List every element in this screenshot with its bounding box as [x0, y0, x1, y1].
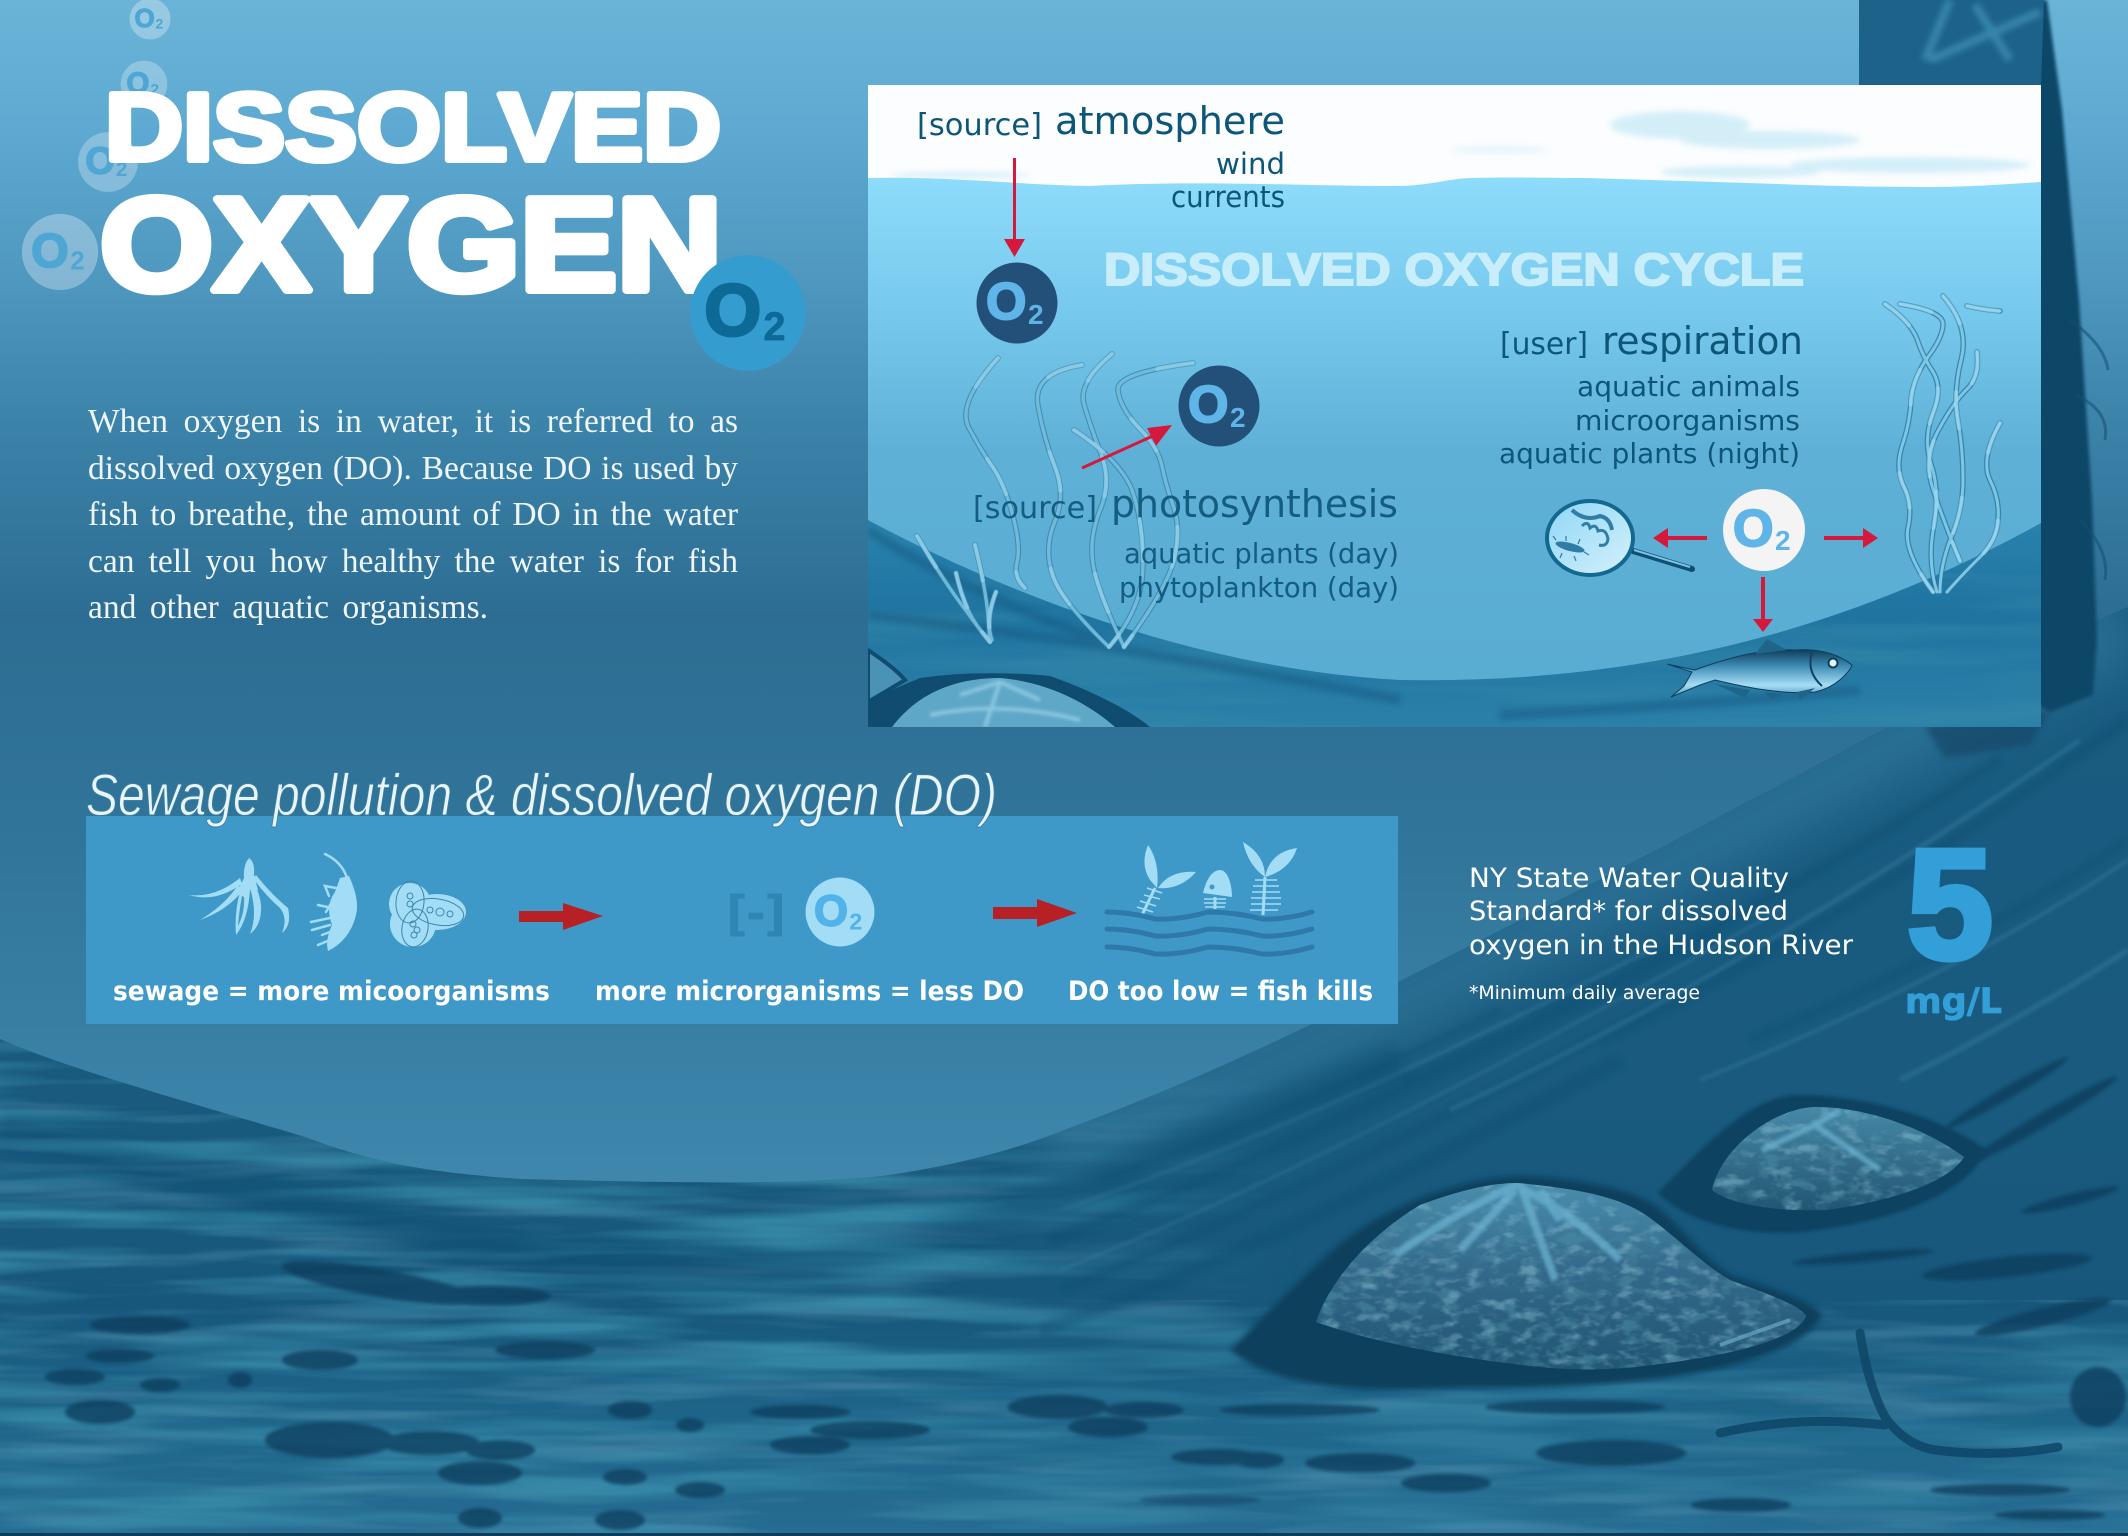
callout: 5 mg/L: mg/L — [1905, 982, 2002, 1022]
icon: large O2 bubble: 2 — [764, 305, 785, 349]
bubble 2: 2 — [150, 82, 159, 99]
bubble 1: 2 — [156, 16, 164, 32]
icon: cell cluster — [389, 880, 466, 949]
text block: intro paragraph — [88, 403, 738, 626]
text block: intro paragraph: can tell you how healthy the water is for fish — [88, 543, 738, 580]
arrow: less oxygen to fish kills — [993, 899, 1077, 927]
clam shell: rear — [1658, 1095, 1986, 1233]
bubble 1: O — [134, 3, 155, 33]
water — [868, 178, 2041, 727]
text block: photosynthesis: aquatic plants (day) — [1124, 537, 1399, 570]
heading: sewage pollution: Sewage pollution & dissolved oxygen (DO) — [86, 763, 997, 828]
bubble 4: 2 — [70, 246, 85, 276]
bubble 3: O — [85, 141, 115, 183]
arrow: plants to O2 — [1082, 425, 1172, 468]
title line: dissolved: DISSOLVED — [105, 74, 721, 181]
icon: minus O2: [-] — [726, 886, 786, 942]
icon: large O2 bubble: O — [704, 270, 761, 352]
icon: O2 dark, photosynthesis: 2 — [1230, 402, 1246, 433]
labels — [113, 976, 1373, 1007]
text block: respiration: aquatic plants (night) — [1499, 437, 1800, 470]
text block: NY standard — [1469, 863, 1854, 1004]
background O2 bubbles — [22, 0, 171, 290]
text block: atmosphere: wind — [1216, 147, 1285, 181]
icon: minus O2: 2 — [849, 909, 862, 935]
arrow: atmosphere to O2 — [1004, 158, 1025, 257]
icon: large O2 bubble — [690, 255, 806, 371]
icon: O2 dark, photosynthesis: O — [1188, 376, 1228, 434]
panel: sewage pollution — [86, 816, 1398, 1024]
text block: NY standard: NY State Water Quality — [1469, 863, 1789, 894]
seaweed: right — [1885, 296, 2000, 592]
sky — [868, 85, 2041, 195]
text block: NY standard: oxygen in the Hudson River — [1469, 930, 1854, 961]
icon: magnifying glass with microorganisms — [1547, 501, 1692, 575]
text block: respiration: respiration — [1602, 319, 1803, 363]
icon: O2 white: 2 — [1775, 525, 1791, 556]
callout: 5 mg/L: 5 — [1907, 818, 1993, 992]
icon: minus O2: O — [814, 886, 848, 935]
clam in panel — [868, 650, 1150, 727]
text block: NY standard: Standard* for dissolved — [1469, 896, 1788, 927]
text block: respiration: [user] — [1500, 327, 1588, 362]
text block: photosynthesis: photosynthesis — [1111, 482, 1398, 526]
labels: DO too low = fish kills — [1068, 976, 1373, 1007]
text block: atmosphere: atmosphere — [1055, 99, 1285, 143]
icon: squid-like organism — [189, 858, 289, 935]
icon: O2 dark, atmosphere: 2 — [1028, 299, 1044, 330]
text block: respiration: aquatic animals — [1577, 370, 1800, 403]
bubble 2 — [121, 61, 167, 107]
icon: minus O2 — [726, 878, 874, 946]
icon: shrimp-like organism — [311, 854, 357, 951]
bubble 4 — [22, 214, 98, 290]
clam shell: front — [1230, 1175, 1822, 1390]
text block: photosynthesis: [source] — [973, 491, 1097, 526]
text block: NY standard: *Minimum daily average — [1469, 982, 1700, 1004]
bubble 4: O — [31, 224, 69, 278]
river bed — [868, 500, 2041, 727]
icon: O2 dark, atmosphere — [976, 262, 1058, 344]
title — [100, 74, 722, 318]
text block: intro paragraph: dissolved oxygen (DO). Because DO is used by — [88, 450, 738, 487]
text block: intro paragraph: fish to breathe, the amount of DO in the water — [88, 496, 738, 533]
icon: fish — [1667, 639, 1852, 700]
bubble 3: 2 — [116, 158, 127, 181]
bubble 2: O — [126, 67, 149, 100]
bubble 3 — [78, 132, 138, 192]
labels: sewage = more micoorganisms — [113, 976, 550, 1007]
arrows: O2 to users — [1653, 528, 1878, 632]
text block: atmosphere — [920, 105, 1284, 208]
bubble 1 — [130, 0, 170, 40]
icon: fish skeletons and waves — [1107, 842, 1312, 954]
soft light edge along rising wave — [1040, 625, 2128, 1160]
text block: respiration — [1499, 319, 1803, 470]
labels: more microrganisms = less DO — [595, 976, 1024, 1007]
seaweed: left — [917, 354, 1193, 647]
icon: O2 dark, atmosphere: O — [986, 273, 1026, 331]
text block: intro paragraph: When oxygen is in water, it is referred to as — [88, 403, 738, 440]
icon: O2 white — [1723, 489, 1805, 571]
text block: respiration: microorganisms — [1575, 404, 1800, 437]
title line: oxygen: OXYGEN — [100, 171, 722, 318]
heading: cycle: DISSOLVED OXYGEN CYCLE — [1104, 244, 1804, 295]
icon: O2 dark, photosynthesis — [1178, 366, 1260, 446]
text block: atmosphere: [source] — [917, 108, 1042, 143]
text block: atmosphere: currents — [1171, 180, 1285, 214]
text block: intro paragraph: and other aquatic organisms. — [88, 589, 488, 626]
text block: photosynthesis — [973, 482, 1399, 604]
dark plant stem behind the cycle panel — [1859, 0, 2108, 758]
icon: O2 white: O — [1733, 500, 1773, 558]
text block: photosynthesis: phytoplankton (day) — [1119, 571, 1399, 604]
arrow: sewage to less oxygen — [519, 903, 603, 930]
panel: dissolved oxygen cycle — [868, 85, 2041, 727]
